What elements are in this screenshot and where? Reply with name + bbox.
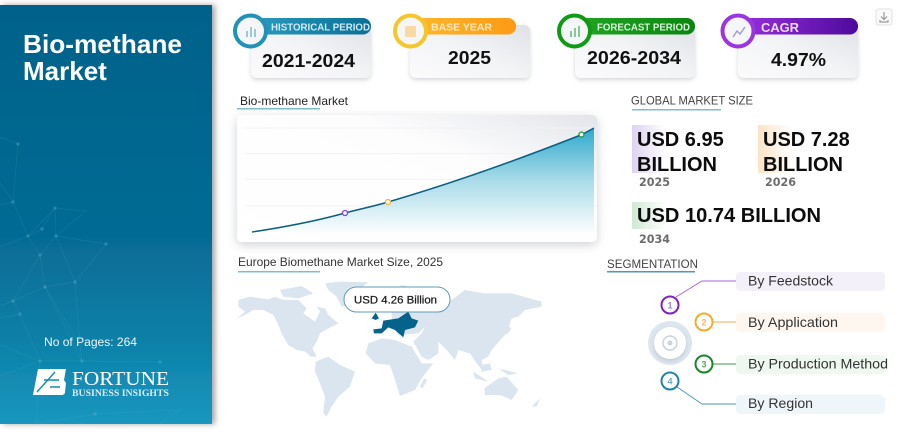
trend line <box>252 128 594 232</box>
market size 2025: BILLION <box>637 154 717 176</box>
stat card: base year: BASE YEAR <box>431 22 492 34</box>
segmentation diagram <box>648 272 888 414</box>
heading: segmentation: SEGMENTATION <box>607 257 698 271</box>
segment 4: 4 <box>667 376 673 386</box>
icon: download <box>876 9 892 25</box>
market size 2026 <box>758 125 850 189</box>
logo: FORTUNE <box>72 368 169 390</box>
segment 3: 3 <box>701 360 707 370</box>
segment 4 <box>662 372 885 414</box>
segment 3: By Production Method <box>748 356 888 372</box>
segment 1: By Feedstock <box>748 272 834 288</box>
heading: global market size: GLOBAL MARKET SIZE <box>631 94 753 108</box>
area fill <box>252 128 594 232</box>
stat card: historical period: HISTORICAL PERIOD <box>271 22 370 34</box>
market size 2026: USD 7.28 <box>763 129 850 151</box>
market size 2034: 2034 <box>639 232 670 246</box>
world map <box>237 282 542 417</box>
hub icon <box>648 321 692 365</box>
market size 2034: USD 10.74 BILLION <box>637 205 821 227</box>
stat card: forecast period: 2026-2034 <box>587 47 682 68</box>
callout: Europe value: USD 4.26 Billion <box>354 294 437 306</box>
market size 2025: 2025 <box>639 175 670 189</box>
segment 1: 1 <box>667 300 673 310</box>
market size 2025 <box>632 125 724 189</box>
stat card: CAGR: 4.97% <box>771 49 826 70</box>
Europe highlight <box>373 312 418 337</box>
callout: Europe value <box>344 287 450 312</box>
segment 2: By Application <box>748 314 838 330</box>
stat card: historical period: 2021-2024 <box>262 50 356 71</box>
area chart <box>237 115 597 242</box>
heading: Europe: Europe Biomethane Market Size, 2025 <box>238 255 443 269</box>
title: Market <box>23 56 107 86</box>
stat card: forecast period: FORECAST PERIOD <box>597 22 690 34</box>
segment 2: 2 <box>701 318 707 328</box>
logo <box>33 368 169 399</box>
market size 2026: 2026 <box>765 175 796 189</box>
title: Bio-methane <box>23 29 182 59</box>
stat card: historical period <box>235 16 371 78</box>
market size 2034 <box>632 202 821 246</box>
stat card: CAGR <box>722 16 858 78</box>
logo mark <box>33 369 66 395</box>
logo: BUSINESS INSIGHTS <box>72 389 169 399</box>
segment 4: By Region <box>748 395 813 411</box>
stat card: base year <box>395 16 530 78</box>
segment 1 <box>662 272 885 314</box>
heading: chart: Bio-methane Market <box>240 94 349 108</box>
market size 2026: BILLION <box>763 154 843 176</box>
market size 2025: USD 6.95 <box>637 129 724 151</box>
stat card: base year: 2025 <box>448 47 491 68</box>
pages label: No of Pages: 264 <box>44 335 137 349</box>
stat card: forecast period <box>559 16 695 78</box>
data points <box>342 210 348 216</box>
sidebar panel <box>0 5 212 424</box>
stat card: CAGR: CAGR <box>761 20 800 35</box>
segment 3 <box>696 355 888 374</box>
segment 2 <box>696 313 885 332</box>
